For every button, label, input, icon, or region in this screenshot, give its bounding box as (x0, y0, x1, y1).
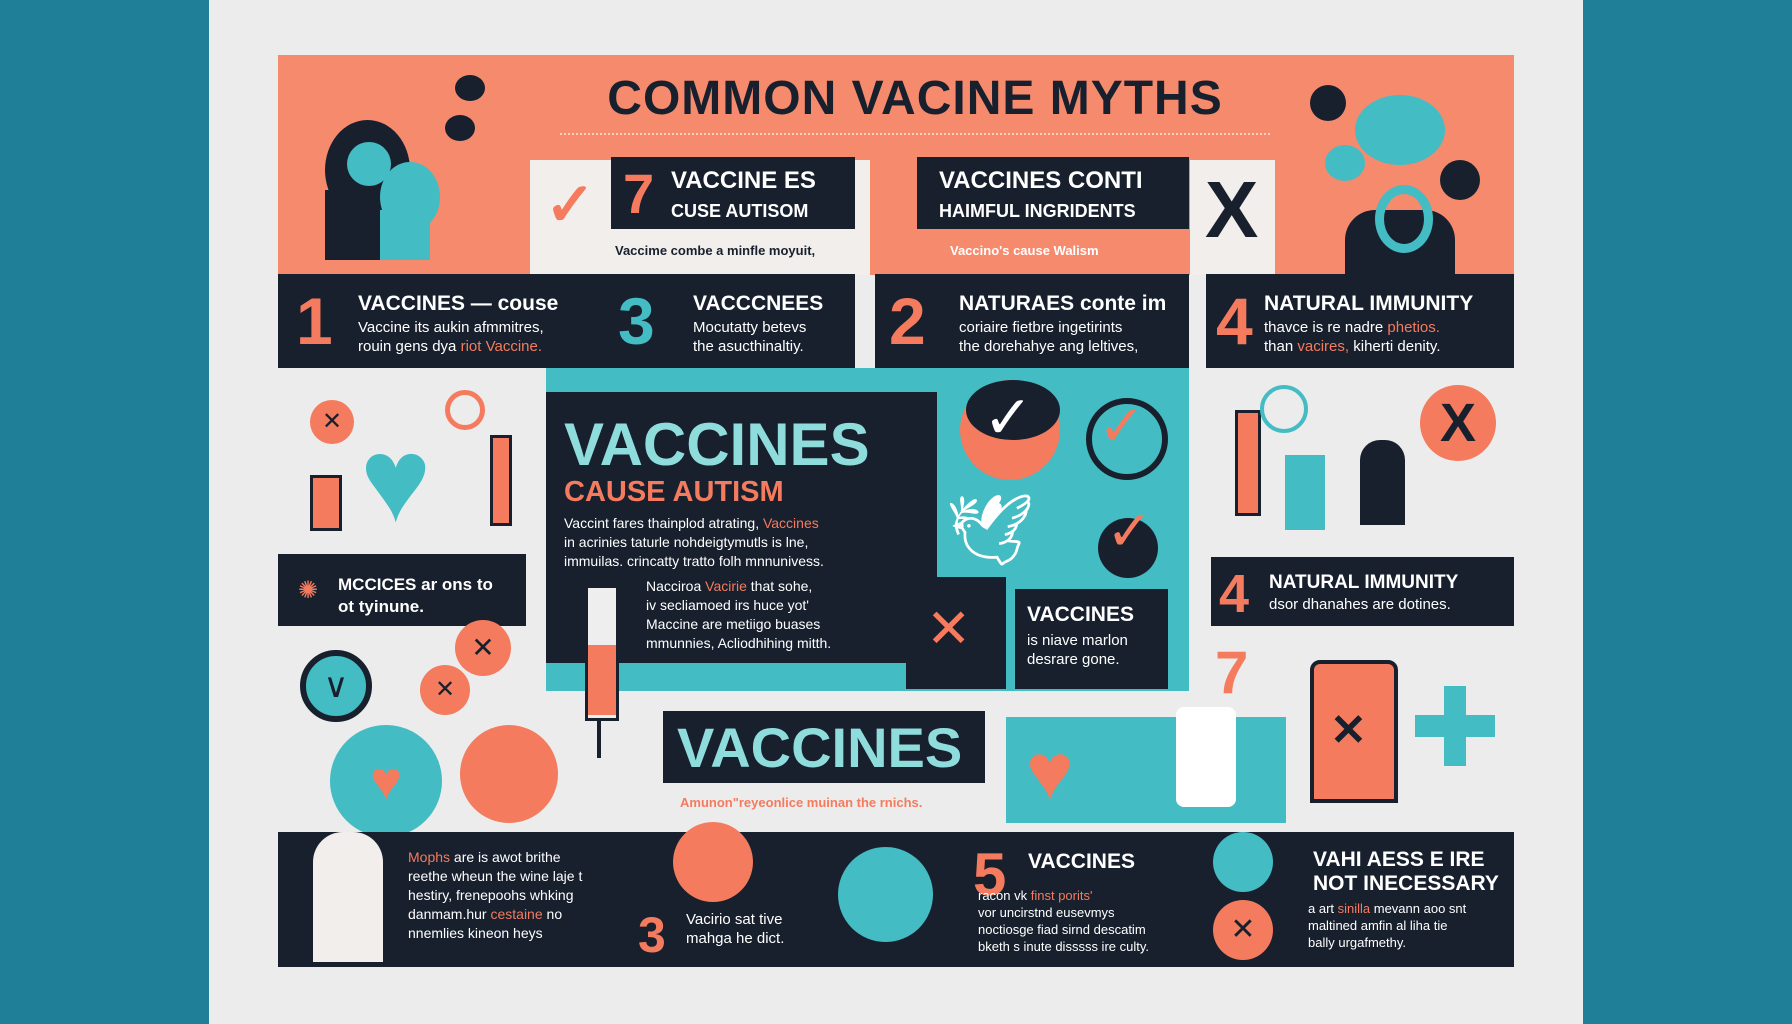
myth 2 (875, 274, 1189, 368)
box: vaccines disease gone: VACCINES (1027, 603, 1134, 626)
myth 2: the dorehahye ang leltives, (959, 338, 1138, 355)
left lower icons (300, 620, 558, 832)
bottom dark band: hestiry, frenepoohs whking (408, 887, 574, 903)
bottom dark band: bally urgafmethy. (1308, 935, 1406, 950)
box: vaccines: VACCINES (677, 716, 962, 779)
box: 4 natural immunity (1211, 557, 1514, 626)
teal block lower right: ♥ (1026, 727, 1074, 816)
left lower icons: ∨ (324, 667, 348, 705)
icon: doctor (313, 832, 383, 962)
left lower icons: ♥ (370, 751, 402, 811)
icons: check circles: ✓ (983, 384, 1033, 451)
text: X (1205, 165, 1258, 254)
box: mccices: ✺ (298, 577, 318, 604)
caption: Vaccino's cause Walism (950, 243, 1099, 258)
main box: vaccines cause autism: Nacciroa Vacirie that sohe, (646, 578, 812, 594)
myth 1 and 3: Mocutatty betevs (693, 319, 806, 336)
bottom dark band: reethe wheun the wine laje t (408, 868, 582, 884)
box: 7 vaccines cause autism: CUSE AUTISOM (671, 201, 808, 221)
icons: check circles: ✓ (1106, 499, 1153, 562)
teal block lower right (1006, 717, 1286, 823)
bottom dark band: danmam.hur cestaine no (408, 906, 562, 922)
myth 1 and 3: 1 (296, 284, 333, 358)
main box: vaccines cause autism: Vaccint fares thainplod atrating, Vaccines (564, 515, 819, 531)
left icons: ♥ (360, 413, 431, 547)
main box: vaccines cause autism: VACCINES (564, 411, 870, 478)
icons: check circles: ✓ (1098, 394, 1145, 457)
bottom dark band: bketh s inute disssss ire culty. (978, 939, 1149, 954)
myth 4: NATURAL IMMUNITY (1264, 292, 1473, 315)
myth 1 and 3: the asucthinaltiy. (693, 338, 804, 355)
main box: vaccines cause autism: mmunnies, Acliodhihing mitth. (646, 635, 831, 651)
bottom dark band: VAHI AESS E IRE (1313, 848, 1485, 871)
box: 4 natural immunity: NATURAL IMMUNITY (1269, 572, 1458, 593)
myth 2: coriaire fietbre ingetirints (959, 319, 1122, 336)
box: vaccines disease gone: is niave marlon (1027, 632, 1128, 649)
bottom dark band: noctiosge fiad sirnd descatim (978, 922, 1146, 937)
box: vaccines disease gone (1015, 589, 1168, 689)
main box: vaccines cause autism: iv secliamoed irs huce yot' (646, 597, 809, 613)
caption: Amunon"reyeonlice muinan the rnichs. (680, 795, 922, 810)
myth 4: 4 (1216, 284, 1253, 358)
main box: vaccines cause autism: CAUSE AUTISM (564, 476, 784, 508)
box: vaccines contain harmful ingredients (917, 157, 1189, 229)
main box: vaccines cause autism: in acrinies taturle nohdeigtymutls is lne, (564, 534, 808, 550)
left icons: ✕ (322, 408, 342, 435)
bottom dark band: a art sinilla mevann aoo snt (1308, 901, 1466, 916)
myth 1 and 3: VACCCNEES (693, 292, 823, 315)
bottom dark band: vor uncirstnd eusevmys (978, 905, 1115, 920)
bottom dark band: racon vk finst porits' (978, 888, 1092, 903)
dark side panels: ✕ (926, 599, 971, 659)
caption: Vaccime combe a minfle moyuit, (615, 243, 815, 258)
box: vaccines contain harmful ingredients: VACCINES CONTI (939, 167, 1143, 194)
myth 4: than vacires, kiherti denity. (1264, 338, 1440, 355)
bottom dark band: VACCINES (1028, 850, 1135, 873)
icon: check and X: ✓ (545, 171, 595, 238)
myth 4 (1206, 274, 1514, 368)
icon: bottle and plus: ✕ (1330, 706, 1367, 755)
bottom dark band: Vacirio sat tive (686, 911, 782, 928)
myth 1 and 3: Vaccine its aukin afmmitres, (358, 319, 544, 336)
box: 7 vaccines cause autism: 7 (623, 162, 654, 225)
box: 7 vaccines cause autism (611, 157, 855, 229)
box: mccices (278, 554, 526, 626)
title: COMMON VACINE MYTHS (607, 72, 1223, 125)
bottom dark band: NOT INECESSARY (1313, 872, 1499, 895)
icon: crossed syringes (838, 847, 933, 942)
left icons (310, 390, 512, 547)
top orange banner (278, 55, 1514, 275)
left lower icons: ✕ (471, 632, 495, 663)
box: vaccines contain harmful ingredients: HAIMFUL INGRIDENTS (939, 201, 1136, 221)
icon: wings: 🕊 (946, 491, 1034, 569)
myth 2: NATURAES conte im (959, 292, 1166, 315)
box: 4 natural immunity: 4 (1219, 564, 1249, 624)
right icons: X (1440, 393, 1476, 453)
bottom dark band: Mophs are is awot brithe (408, 849, 561, 865)
dark myth row (278, 274, 1514, 368)
box: vaccines disease gone: desrare gone. (1027, 651, 1120, 668)
icon: heads with gears (325, 75, 485, 260)
page background (209, 0, 1583, 1024)
bottom dark band: 5 (973, 841, 1006, 908)
myth 1 and 3: rouin gens dya riot Vaccine. (358, 338, 542, 355)
bottom dark band: 3 (638, 907, 666, 963)
myth 4: thavce is re nadre phetios. (1264, 319, 1440, 336)
dark side panels (906, 577, 1006, 689)
icons: circles (1213, 832, 1273, 892)
box: mccices: ot tyinune. (338, 597, 424, 616)
icons: check circles (960, 380, 1168, 578)
myth 1 and 3: VACCINES — couse (358, 292, 558, 315)
bottom dark band: nnemlies kineon heys (408, 925, 543, 941)
main box: vaccines cause autism (546, 392, 937, 663)
myth 1 and 3 (278, 274, 855, 368)
light middle area in banner (530, 160, 870, 275)
box: 4 natural immunity: dsor dhanahes are dotines. (1269, 596, 1451, 613)
icon: clouds and ribbon right (1310, 85, 1480, 274)
myth 1 and 3: 3 (618, 284, 655, 358)
bottom dark band: ✕ (1230, 913, 1256, 946)
icon: syringe center (585, 588, 619, 758)
bottom dark band: mahga he dict. (686, 930, 784, 947)
bottom dark band: maltined amfin al liha tie (1308, 918, 1447, 933)
main box: vaccines cause autism: immuilas. crincatty tratto folh mnnunivess. (564, 553, 824, 569)
icon: bottle and plus (1310, 660, 1495, 803)
bottom dark band (278, 832, 1514, 967)
box: mccices: MCCICES ar ons to (338, 575, 493, 594)
teal center panel (546, 368, 1189, 691)
text: 7 (1215, 639, 1248, 706)
icon: caduceus (673, 822, 753, 902)
right icons (1235, 385, 1496, 530)
main box: vaccines cause autism: Maccine are metiigo buases (646, 616, 820, 632)
myth 2: 2 (889, 284, 926, 358)
left lower icons: ✕ (435, 676, 455, 703)
box: 7 vaccines cause autism: VACCINE ES (671, 167, 816, 194)
